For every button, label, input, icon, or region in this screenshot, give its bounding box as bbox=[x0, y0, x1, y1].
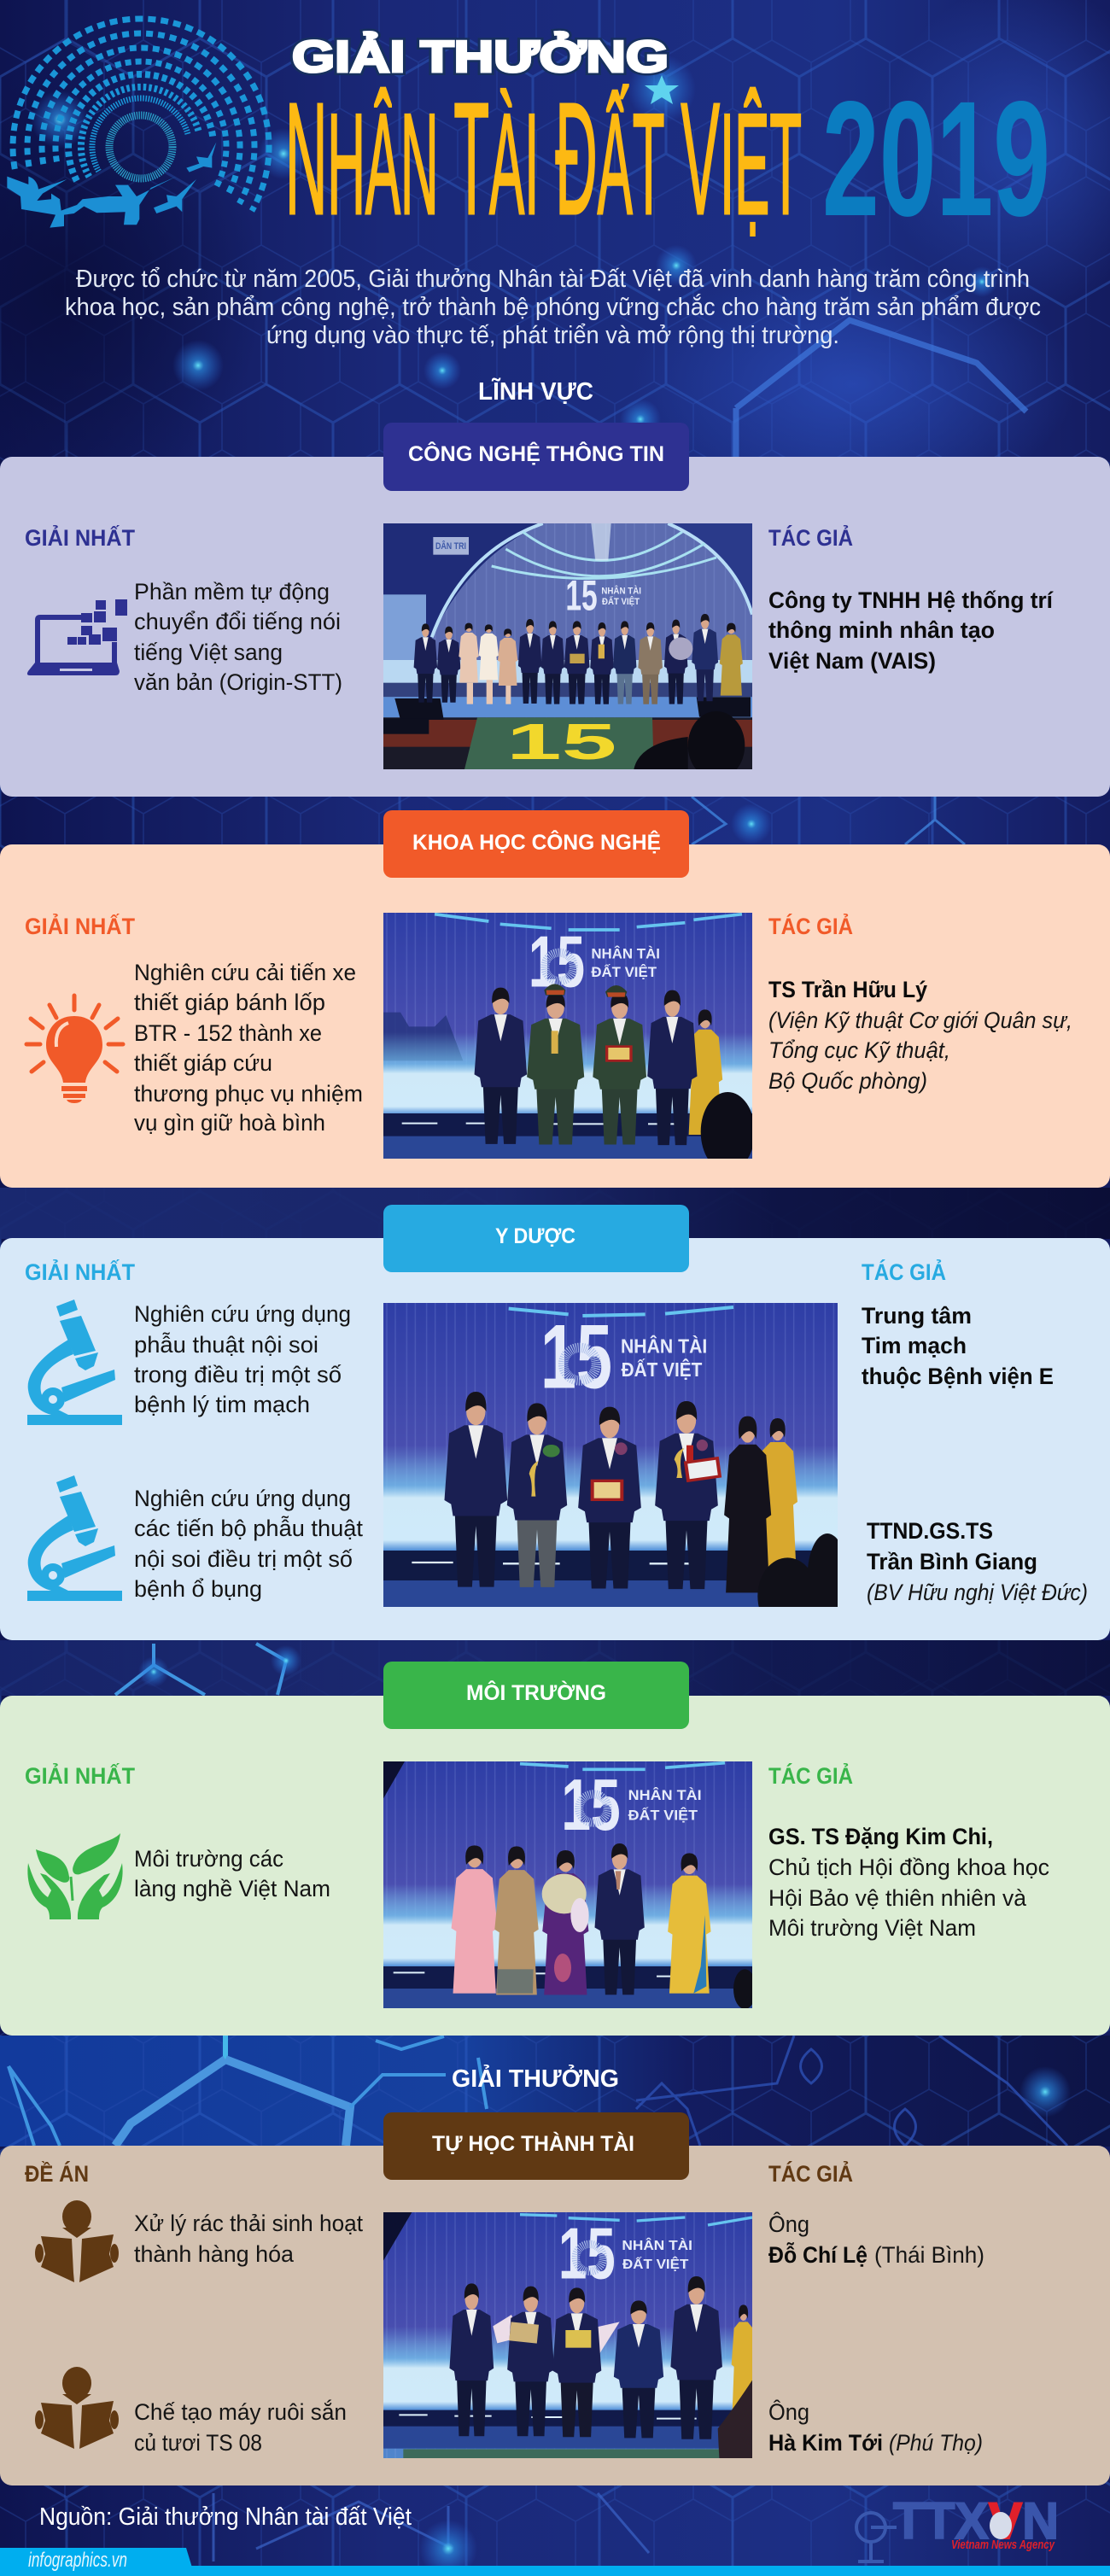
heading: GIẢI THƯỞNG: GIẢI THƯỞNG bbox=[452, 2064, 619, 2093]
title: Nhân Tài Đất Việt: NHÂN TÀI ĐẤT VIỆT bbox=[285, 71, 802, 248]
award description: BTR - 152 thành xe bbox=[134, 1020, 322, 1046]
icon: leaves in hands bbox=[27, 1833, 123, 1919]
photo: group on stage: 15 bbox=[506, 713, 616, 770]
tab bbox=[383, 810, 689, 878]
panel: Tự học thành tài bbox=[0, 2112, 1110, 2485]
panel card bbox=[0, 844, 1110, 1188]
photo: winners on stage: NHÂN TÀI bbox=[621, 1334, 707, 1357]
icon: microscope bbox=[27, 1300, 122, 1425]
logo: TTXVN: Vietnam News Agency bbox=[951, 2538, 1054, 2552]
photo: winners on stage: ĐẤT VIỆT bbox=[622, 1358, 702, 1381]
award description 2: bệnh ổ bụng bbox=[134, 1576, 262, 1602]
author 2: TTND.GS.TS bbox=[867, 1518, 993, 1544]
icon: light bulb bbox=[26, 996, 123, 1103]
author: thông minh nhân tạo bbox=[768, 617, 995, 643]
photo: winners on stage: 15 bbox=[558, 2213, 616, 2294]
label: tác giả: TÁC GIẢ bbox=[768, 1761, 853, 1789]
project 2: củ tươi TS 08 bbox=[134, 2430, 262, 2456]
author 1: Trung tâm bbox=[862, 1303, 972, 1329]
panel: Y dược bbox=[0, 1205, 1110, 1640]
award description bbox=[134, 579, 342, 695]
award description 2 bbox=[134, 1486, 364, 1602]
label: tác giả: TÁC GIẢ bbox=[862, 1258, 946, 1285]
panel: Môi trường bbox=[0, 1662, 1110, 2036]
label: giải nhất: GIẢI NHẤT bbox=[25, 523, 135, 551]
label: tác giả: TÁC GIẢ bbox=[768, 912, 853, 939]
photo: winners on stage bbox=[383, 1761, 757, 2009]
tab: TỰ HỌC THÀNH TÀI bbox=[432, 2131, 634, 2156]
author 2: Hà Kim Tới bbox=[768, 2430, 883, 2456]
award description: làng nghề Việt Nam bbox=[134, 1876, 330, 1901]
icon: laptop with pixels bbox=[27, 599, 127, 675]
label: giải nhất: GIẢI NHẤT bbox=[25, 1258, 135, 1285]
panel card bbox=[0, 457, 1110, 797]
icon: reader with book bbox=[35, 2200, 119, 2282]
author: GS. TS Đặng Kim Chi, bbox=[768, 1824, 993, 1849]
award description: tiếng Việt sang bbox=[134, 640, 283, 665]
author bbox=[768, 977, 1072, 1094]
photo: winners on stage: 15 bbox=[529, 922, 585, 1003]
label: giải nhất: GIẢI NHẤT bbox=[25, 1761, 135, 1789]
intro paragraph: ứng dụng vào thực tế, phát triển và mở rộng thị trường. bbox=[266, 322, 839, 349]
panel card bbox=[0, 1238, 1110, 1640]
author: Việt Nam (VAIS) bbox=[768, 648, 936, 674]
photo: winners on stage: ĐẤT VIỆT bbox=[628, 1807, 698, 1823]
author 2: Ông bbox=[768, 2398, 809, 2425]
photo: winners on stage: ĐẤT VIỆT bbox=[591, 964, 657, 980]
author 1 bbox=[862, 1303, 1054, 1389]
award description: Môi trường các bbox=[134, 1846, 283, 1872]
photo: winners on stage: NHÂN TÀI bbox=[628, 1787, 702, 1803]
panel card bbox=[0, 1696, 1110, 2036]
award description: thương phục vụ nhiệm bbox=[134, 1081, 363, 1107]
author: Môi trường Việt Nam bbox=[768, 1915, 976, 1941]
logo: TTXVN: TTXVN bbox=[893, 2492, 1059, 2550]
photo: winners on stage bbox=[383, 1303, 838, 1607]
author 1: (Thái Bình) bbox=[874, 2242, 984, 2268]
award description 1: bệnh lý tim mạch bbox=[134, 1392, 310, 1417]
panel: Công nghệ thông tin bbox=[0, 423, 1110, 797]
award description: Nghiên cứu cải tiến xe bbox=[134, 960, 356, 985]
award description bbox=[134, 1846, 330, 1901]
intro paragraph: khoa học, sản phẩm công nghệ, trở thành bệ phóng vững chắc cho hàng trăm sản phẩm được bbox=[65, 293, 1041, 321]
photo: group on stage: NHÂN TÀI bbox=[601, 586, 641, 597]
tab: KHOA HỌC CÔNG NGHỆ bbox=[412, 829, 661, 855]
author 1: Tim mạch bbox=[862, 1333, 967, 1358]
author 1: Ông bbox=[768, 2211, 809, 2237]
icon: microscope bbox=[27, 1475, 122, 1601]
award description 1: phẫu thuật nội soi bbox=[134, 1331, 318, 1358]
tab bbox=[383, 423, 689, 491]
photo: group on stage bbox=[383, 523, 752, 780]
author 1 bbox=[768, 2211, 984, 2268]
author: (Viện Kỹ thuật Cơ giới Quân sự, bbox=[768, 1008, 1072, 1033]
label: giải nhất: GIẢI NHẤT bbox=[25, 912, 135, 939]
author 1: thuộc Bệnh viện E bbox=[862, 1364, 1054, 1389]
photo: winners on stage: NHÂN TÀI bbox=[591, 945, 660, 961]
photo: group on stage: 15 bbox=[565, 572, 598, 620]
label: đề án: ĐỀ ÁN bbox=[25, 2160, 89, 2187]
source line: Nguồn: Giải thưởng Nhân tài đất Việt bbox=[39, 2503, 412, 2531]
award description: Phần mềm tự động bbox=[134, 579, 330, 605]
panel: Khoa học công nghệ bbox=[0, 810, 1110, 1188]
photo: winners on stage: NHÂN TÀI bbox=[622, 2237, 692, 2253]
intro paragraph: Được tổ chức từ năm 2005, Giải thưởng Nhân tài Đất Việt đã vinh danh hàng trăm công trình bbox=[76, 266, 1030, 293]
project 1 bbox=[134, 2211, 363, 2267]
tab: CÔNG NGHỆ THÔNG TIN bbox=[408, 441, 664, 466]
author: Chủ tịch Hội đồng khoa học bbox=[768, 1855, 1049, 1880]
panel card bbox=[0, 2146, 1110, 2485]
heading: LĨNH VỰC: LĨNH VỰC bbox=[478, 377, 593, 406]
author: TS Trần Hữu Lý bbox=[768, 977, 927, 1002]
intro paragraph bbox=[65, 266, 1041, 349]
tab bbox=[383, 1205, 689, 1272]
author 2 bbox=[867, 1518, 1088, 1605]
label: tác giả: TÁC GIẢ bbox=[768, 2159, 853, 2187]
photo: group on stage: DÂN TRI bbox=[435, 540, 466, 552]
award description: vụ gìn giữ hoà bình bbox=[134, 1110, 325, 1136]
project 2 bbox=[134, 2398, 347, 2456]
author bbox=[768, 587, 1054, 674]
award description: thiết giáp cứu bbox=[134, 1050, 272, 1076]
tab bbox=[383, 1662, 689, 1729]
author 2: (Phú Thọ) bbox=[889, 2430, 983, 2456]
photo: winners on stage: ĐẤT VIỆT bbox=[622, 2256, 689, 2272]
author 2: Trần Bình Giang bbox=[867, 1549, 1037, 1574]
award description 2: nội soi điều trị một số bbox=[134, 1546, 353, 1572]
author 2: (BV Hữu nghị Việt Đức) bbox=[867, 1580, 1088, 1605]
title: GIẢI THƯỞNG: GIẢI THƯỞNG bbox=[292, 32, 669, 82]
project 2: Chế tạo máy ruôi sắn bbox=[134, 2398, 347, 2425]
footer band bbox=[0, 2548, 1110, 2576]
award description: văn bản (Origin-STT) bbox=[134, 669, 342, 695]
photo: group on stage: ĐẤT VIỆT bbox=[602, 596, 640, 607]
tab bbox=[383, 2112, 689, 2180]
author bbox=[768, 1824, 1049, 1941]
author 1: Đỗ Chí Lệ bbox=[768, 2241, 868, 2268]
award description bbox=[134, 960, 363, 1136]
photo: winners on stage: 15 bbox=[561, 1765, 621, 1846]
photo: winners on stage bbox=[383, 913, 755, 1171]
tab: Y DƯỢC bbox=[495, 1224, 575, 1248]
award description 1 bbox=[134, 1301, 351, 1417]
tab: MÔI TRƯỜNG bbox=[466, 1679, 606, 1705]
award description 2: các tiến bộ phẫu thuật bbox=[134, 1515, 364, 1541]
author 2 bbox=[768, 2398, 983, 2456]
award description 1: Nghiên cứu ứng dụng bbox=[134, 1301, 351, 1327]
author: Hội Bảo vệ thiên nhiên và bbox=[768, 1885, 1027, 1911]
award description: thiết giáp bánh lốp bbox=[134, 990, 325, 1015]
title: GIẢI THƯỞNG: GIẢI THƯỞNG bbox=[292, 32, 669, 82]
project 1: Xử lý rác thải sinh hoạt bbox=[134, 2211, 363, 2236]
icon: reader with book bbox=[35, 2367, 119, 2449]
award description 1: trong điều trị một số bbox=[134, 1362, 342, 1387]
logo: TTXVN bbox=[856, 2492, 1059, 2561]
label: tác giả: TÁC GIẢ bbox=[768, 523, 853, 551]
award description: chuyển đổi tiếng nói bbox=[134, 609, 341, 634]
author: Bộ Quốc phòng) bbox=[768, 1068, 927, 1094]
author: Công ty TNHH Hệ thống trí bbox=[768, 587, 1054, 613]
footer site name: infographics.vn bbox=[28, 2549, 127, 2572]
author: Tổng cục Kỹ thuật, bbox=[768, 1037, 950, 1063]
photo: winners on stage: 15 bbox=[540, 1305, 612, 1407]
award description 2: Nghiên cứu ứng dụng bbox=[134, 1486, 351, 1511]
project 1: thành hàng hóa bbox=[134, 2241, 295, 2267]
photo: winners on stage bbox=[383, 2212, 756, 2458]
logo: dotted circular emblem with swooping figures bbox=[7, 19, 309, 228]
